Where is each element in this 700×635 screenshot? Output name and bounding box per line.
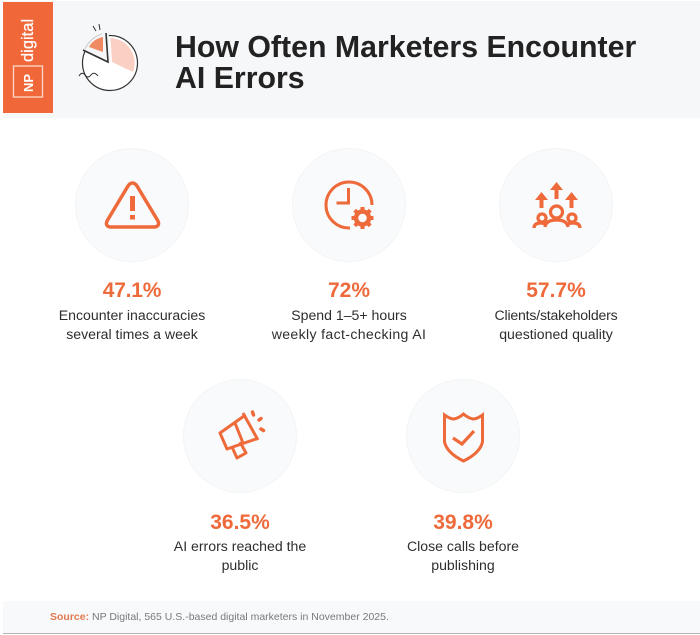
- panel: clients stat: [495, 148, 618, 342]
- title: AI Errors: [175, 62, 305, 95]
- icon: pie chart: [78, 24, 138, 92]
- header band: [3, 1, 700, 118]
- footer rule: [3, 633, 700, 634]
- stat description: weekly fact-checking AI: [272, 326, 426, 342]
- stat description: Close calls before: [407, 538, 519, 554]
- stat description: [495, 307, 618, 342]
- stat description: publishing: [431, 557, 495, 573]
- stat value: 72%: [328, 279, 370, 302]
- stat description: [407, 538, 519, 573]
- stat description: Encounter inaccuracies: [59, 307, 205, 323]
- stat value: 57.7%: [526, 279, 586, 302]
- stat value: 36.5%: [210, 511, 270, 534]
- panel: inaccuracies stat: [59, 148, 205, 342]
- stat description: Spend 1–5+ hours: [291, 307, 407, 323]
- stat value: 39.8%: [433, 511, 493, 534]
- footer band: [3, 601, 700, 633]
- icon: megaphone: [183, 379, 297, 493]
- title: How Often Marketers Encounter: [175, 31, 636, 64]
- source note: Source: NP Digital, 565 U.S.-based digital marketers in November 2025.: [50, 611, 389, 623]
- icon: shield check: [406, 379, 520, 493]
- panel: reached public stat: [174, 379, 306, 573]
- stat description: [174, 538, 306, 573]
- panel: fact-checking stat: [272, 148, 426, 342]
- stat description: public: [222, 557, 258, 573]
- icon: clock with gear: [292, 148, 406, 262]
- logo: NP digital: NP: [21, 74, 36, 92]
- stat description: Clients/stakeholders: [495, 307, 617, 323]
- stat description: [272, 307, 426, 342]
- icon: people with arrows: [499, 148, 613, 262]
- stat description: questioned quality: [499, 326, 613, 342]
- stat description: AI errors reached the: [174, 538, 306, 554]
- stat value: 47.1%: [103, 279, 161, 302]
- icon: warning triangle: [75, 148, 189, 262]
- panel: close calls stat: [406, 379, 520, 573]
- stat description: [59, 307, 205, 342]
- logo: NP digital: [3, 2, 53, 113]
- stat description: several times a week: [66, 326, 198, 342]
- title: [175, 31, 636, 95]
- logo: NP digital: digital: [19, 19, 37, 62]
